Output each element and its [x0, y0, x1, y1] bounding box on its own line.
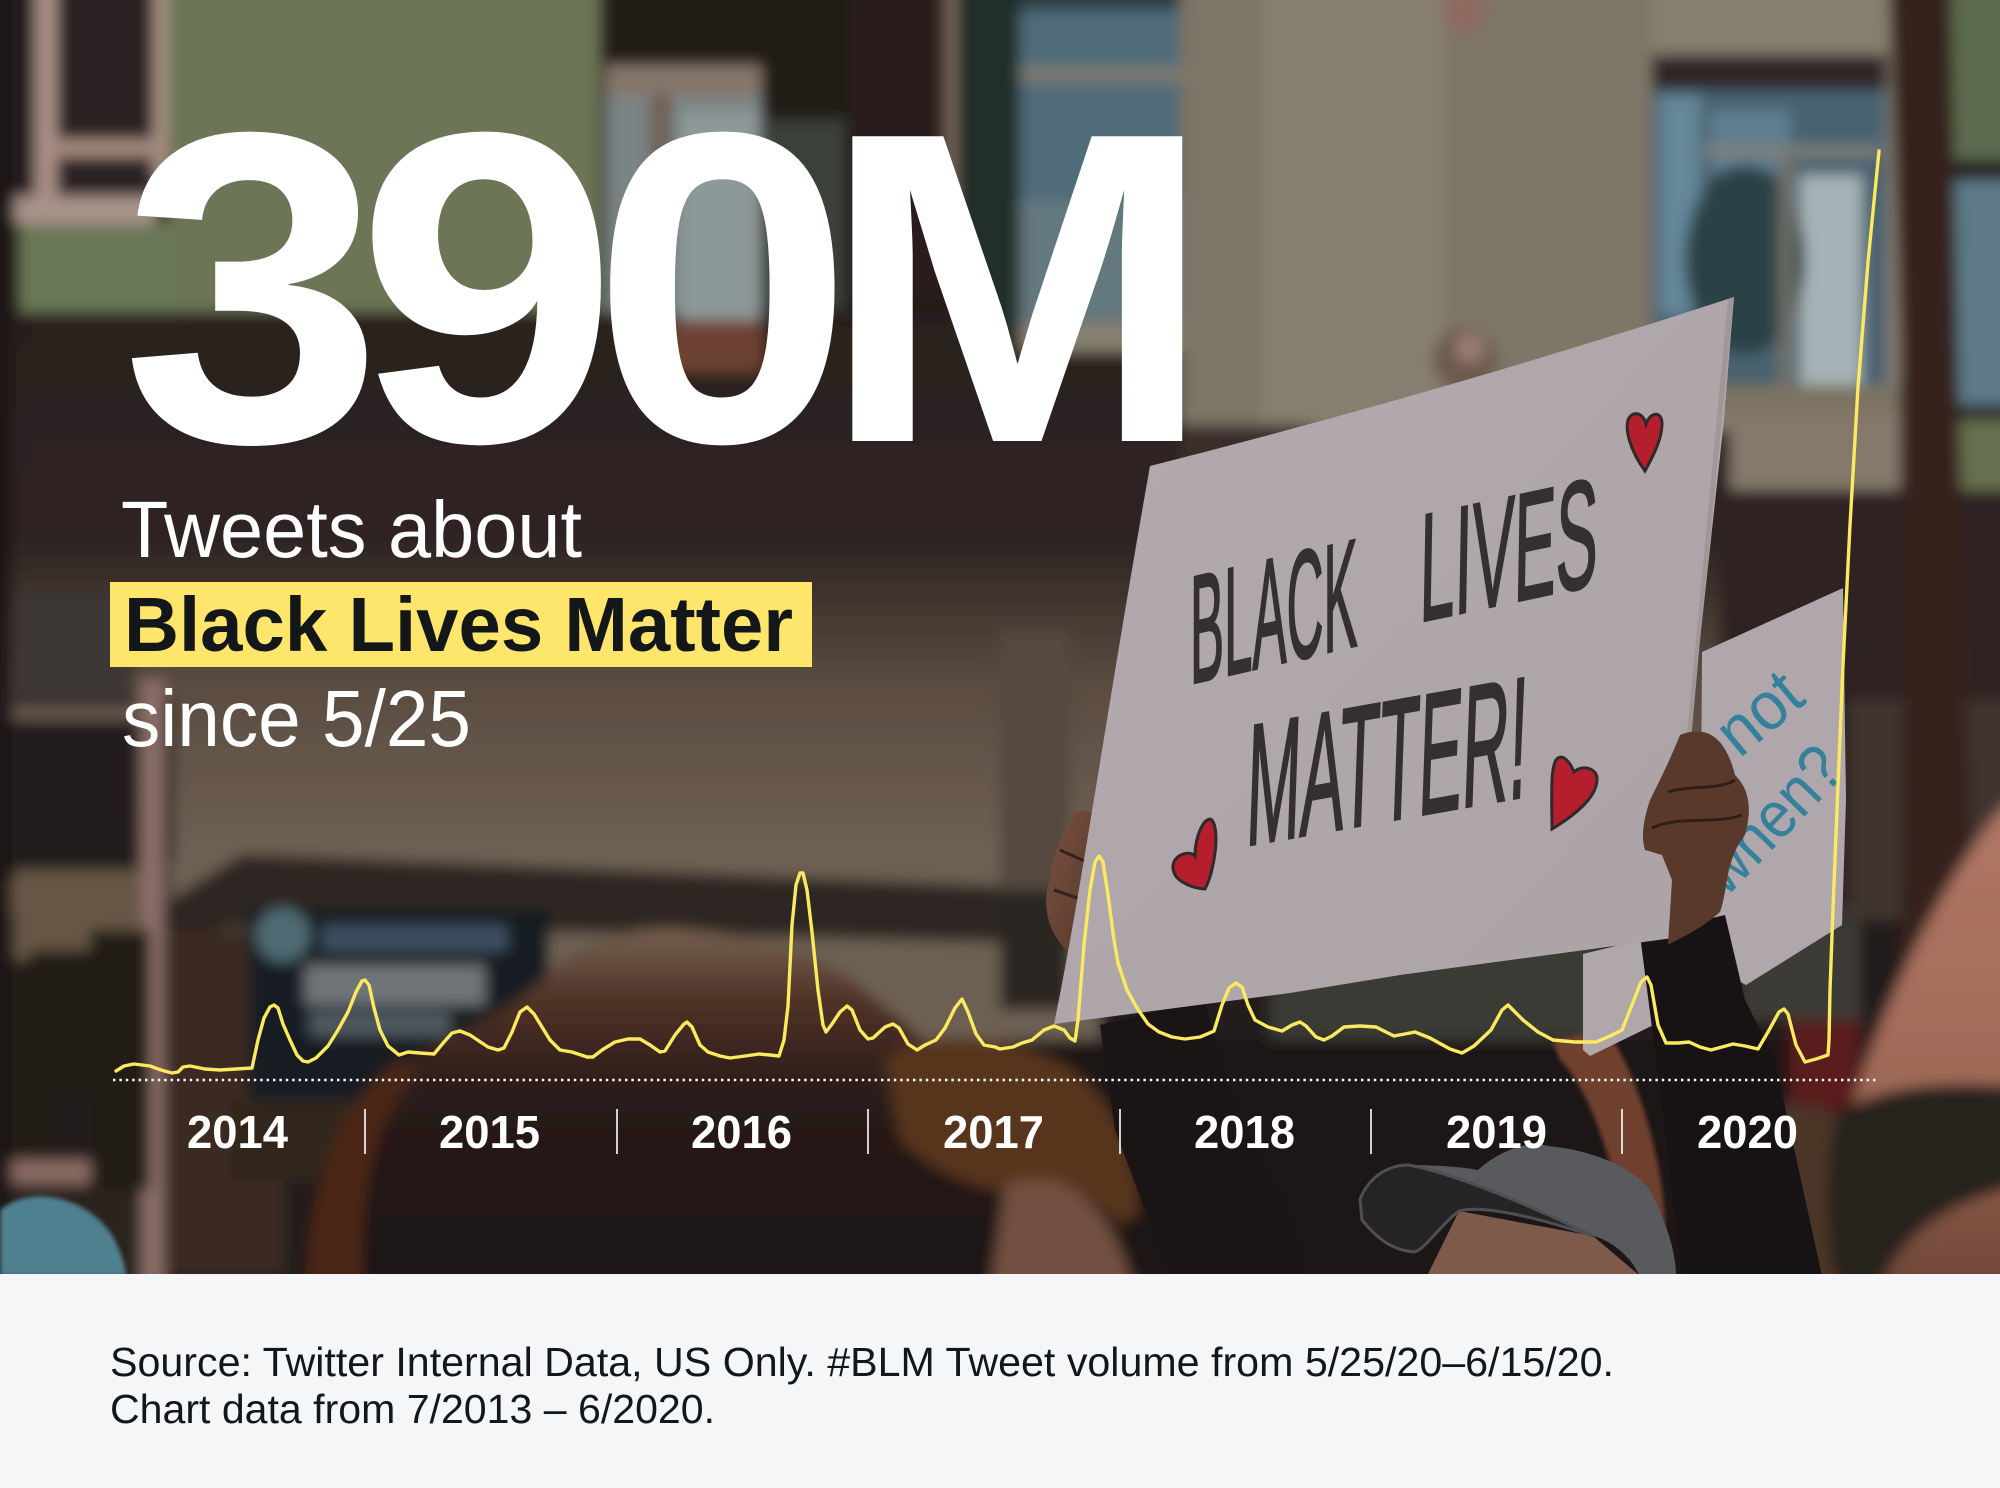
sign: if not when: f not — [1673, 655, 1817, 793]
x axis year labels: 2019 — [1446, 1106, 1547, 1158]
heart: top right — [1627, 414, 1662, 471]
footer panel with source note — [0, 1274, 2000, 1488]
face under cap — [1427, 1211, 1640, 1276]
footer panel with source note: Source: Twitter Internal Data, US Only. #BLM Tweet volume from 5/25/20–6/15/20. — [110, 1339, 1614, 1385]
pole — [141, 680, 164, 1300]
x axis year labels: 2015 — [439, 1106, 540, 1158]
subheading: tweets about: Tweets about — [121, 485, 582, 574]
x axis year labels: 2016 — [691, 1106, 792, 1158]
green wall — [170, 0, 600, 315]
blurred head with hair — [300, 929, 1010, 1290]
hand: right — [1643, 731, 1749, 945]
large foreground face at right — [1830, 760, 2000, 1290]
x axis year labels: 2020 — [1697, 1106, 1798, 1158]
tree trunk — [1888, 0, 1975, 1000]
background right of the sign — [1000, 630, 1860, 1280]
main cardboard sign — [1054, 297, 1734, 1024]
line chart: tweet volume — [113, 151, 1879, 1080]
small second-row hand — [1552, 1030, 1665, 1276]
sign: if not when: when? — [1682, 730, 1858, 908]
sign: if not when — [1583, 588, 1858, 1056]
right window — [1652, 55, 1900, 494]
yellow trend line — [116, 151, 1879, 1073]
headline number: 390M — [121, 40, 1214, 535]
x axis year labels: 2018 — [1194, 1106, 1295, 1158]
curly hair man — [885, 1038, 1138, 1290]
hand: left — [1046, 811, 1108, 1000]
main cardboard sign: MATTER! — [1244, 640, 1531, 883]
awning and store sign — [90, 854, 1100, 1275]
main cardboard sign: LIVES — [1418, 445, 1599, 655]
baseline — [113, 1079, 1877, 1081]
footer panel with source note: Chart data from 7/2013 – 6/2020. — [110, 1386, 715, 1432]
small window sill at mid-top — [1433, 328, 1497, 392]
x axis year labels — [187, 1106, 1798, 1158]
right green and far window — [1950, 0, 2000, 160]
right curly head — [1730, 1104, 1880, 1290]
heart: bottom right — [1552, 757, 1597, 829]
gray cap — [1360, 1144, 1676, 1276]
x axis year labels: 2014 — [187, 1106, 288, 1158]
left window lower — [0, 700, 160, 1285]
highlight label: Black Lives Matter: Black Lives Matter — [124, 582, 793, 668]
sign lettering: BLACK — [1190, 507, 1358, 717]
central windows — [600, 0, 1200, 372]
x axis year labels: 2017 — [943, 1106, 1044, 1158]
dark lower storey band — [0, 312, 2000, 912]
beige concrete wall — [1180, 0, 1900, 430]
sign lettering — [1190, 445, 1599, 883]
black sleeves of protester — [1100, 915, 1822, 1276]
subheading: since 5/25: since 5/25 — [122, 674, 471, 763]
upper-left window — [15, 0, 169, 224]
heart: bottom left — [1173, 819, 1216, 889]
far-left dark strip — [0, 0, 12, 1340]
blue hat bottom left — [0, 1196, 126, 1276]
